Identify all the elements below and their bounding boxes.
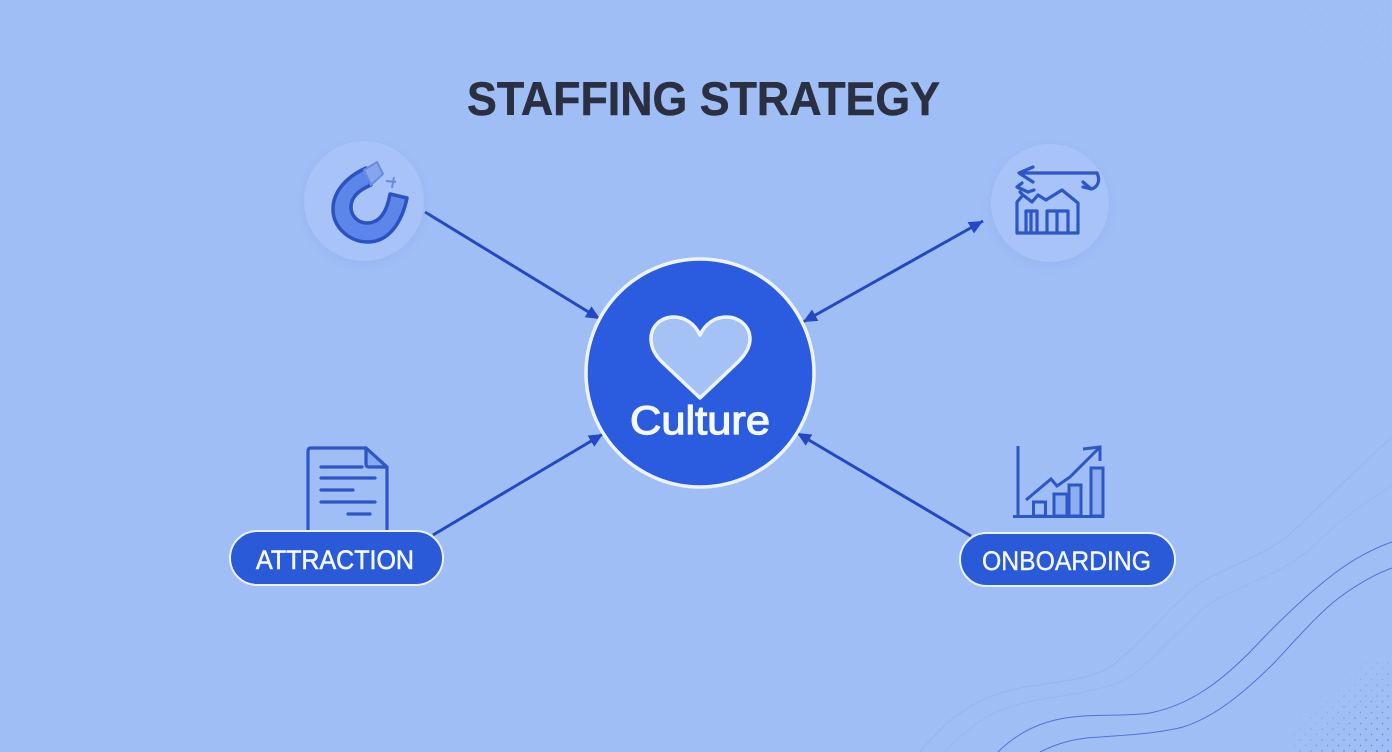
pill: onboarding: ONBOARDING [982, 546, 1151, 576]
title: STAFFING STRATEGY [467, 72, 940, 125]
arrow: onboarding to culture [797, 433, 971, 536]
icon: factory with arrow in badge [991, 144, 1109, 262]
pill: onboarding [960, 533, 1175, 586]
icon: document [308, 448, 387, 531]
icon: growth chart [1013, 446, 1104, 516]
pill: attraction [230, 531, 443, 585]
arrow: magnet to culture [425, 212, 600, 319]
pill: attraction: ATTRACTION [256, 545, 414, 575]
icon: magnet in badge [304, 141, 424, 261]
arrow: culture to factory, two-way [803, 221, 983, 322]
center circle: culture [586, 259, 814, 487]
label: culture: Culture [630, 399, 770, 443]
icon: heart [651, 317, 750, 398]
arrow: attraction to culture [433, 434, 603, 535]
